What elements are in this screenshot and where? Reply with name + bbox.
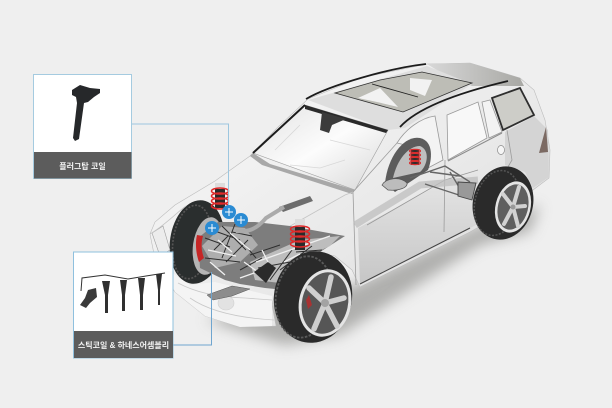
- rear lamp: [539, 127, 548, 153]
- rear chassis: [355, 166, 478, 225]
- side mirror: [382, 179, 407, 190]
- car far front wheel: [164, 197, 230, 287]
- callout line: stick coil: [173, 272, 212, 345]
- car roof front: [308, 66, 472, 130]
- windshield: [250, 105, 388, 194]
- callout line: plug-top coil: [132, 124, 228, 212]
- panel: stick coil and harness assembly: [74, 252, 173, 358]
- rear quarter shading: [505, 116, 549, 188]
- rear window: [492, 88, 534, 130]
- label band: [34, 152, 132, 178]
- car roof rear panel: [427, 63, 524, 86]
- side window front: [397, 116, 443, 168]
- plus marker 1: [222, 205, 236, 219]
- hood creases: [150, 192, 353, 242]
- sunroof: [335, 72, 472, 112]
- plus marker 2: [234, 213, 248, 227]
- car front right wheel: [267, 245, 359, 349]
- side window rear: [447, 102, 487, 160]
- plus marker 3: [205, 221, 219, 235]
- label: stick coil and harness assembly: 스틱코일 & 하네스어셈블리: [78, 340, 169, 350]
- car rear wheel: [465, 160, 541, 246]
- car ground shadow: [205, 205, 540, 345]
- door panels: [353, 130, 512, 285]
- roof rail: [306, 64, 508, 127]
- front right spring: [290, 219, 310, 250]
- hood vent: [279, 196, 313, 212]
- car illustration: [150, 63, 550, 349]
- side window quarter: [482, 100, 502, 138]
- door handle: [498, 146, 504, 154]
- label: plug-top coil: 플러그탑 코일: [59, 161, 106, 171]
- car body: [150, 63, 550, 327]
- rear inner wheel arch with suspension: [385, 138, 431, 192]
- car front bumper: [152, 226, 274, 327]
- label band: [74, 331, 173, 358]
- front left spring: [212, 183, 228, 209]
- lower door shading: [358, 172, 478, 284]
- icon: stick coils with harness: [80, 273, 165, 313]
- engine bay: [196, 207, 345, 300]
- icon: plug-top coil: [72, 85, 100, 141]
- panel: plug-top coil: [34, 74, 132, 178]
